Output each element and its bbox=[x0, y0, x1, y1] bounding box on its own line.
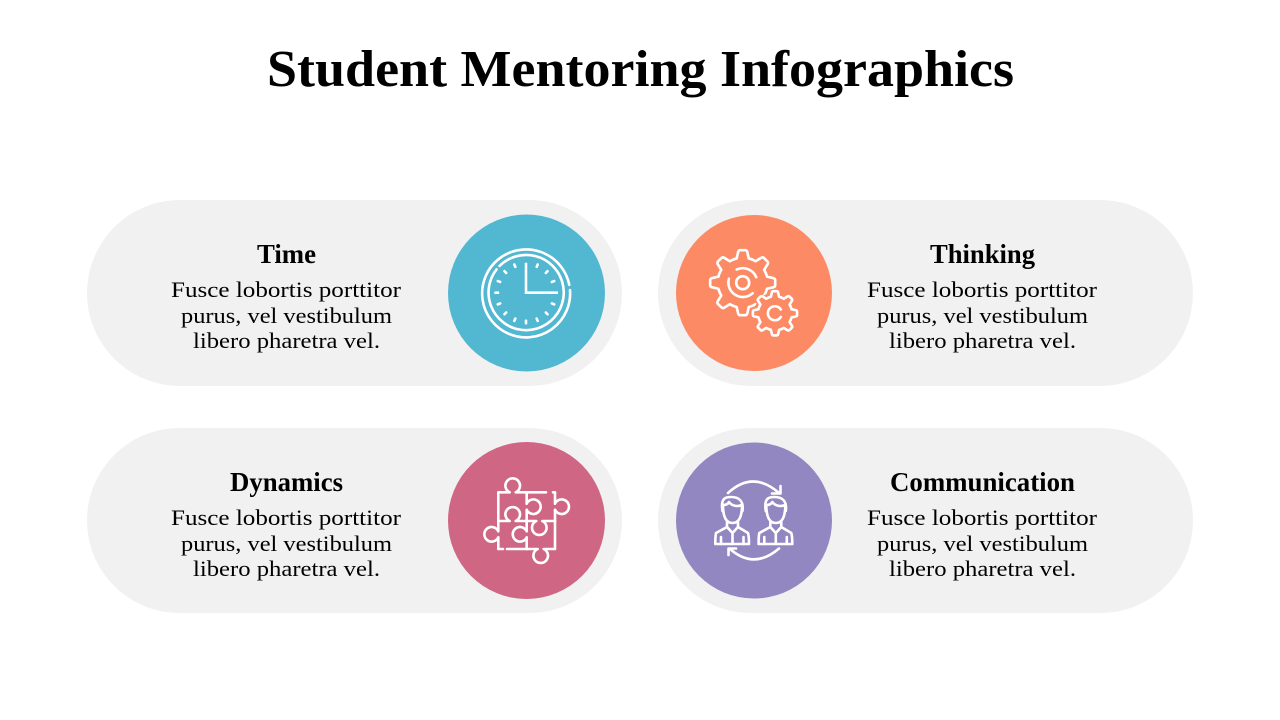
icon: clock bbox=[482, 249, 570, 337]
text block: time: purus, vel vestibulum bbox=[181, 303, 392, 328]
heading: thinking: Thinking bbox=[930, 239, 1035, 269]
panel background: thinking bbox=[658, 200, 1193, 386]
panel: time bbox=[87, 200, 622, 386]
title: Student Mentoring Infographics bbox=[267, 41, 1014, 98]
icon circle: time bbox=[448, 214, 605, 372]
icon: puzzle bbox=[484, 478, 569, 563]
text block: thinking: libero pharetra vel. bbox=[889, 328, 1076, 353]
text block: thinking: Fusce lobortis porttitor bbox=[867, 277, 1098, 302]
text block: thinking: purus, vel vestibulum bbox=[877, 303, 1088, 328]
panel: dynamics bbox=[87, 428, 622, 613]
panel background: dynamics bbox=[87, 428, 622, 613]
icon circle: communication bbox=[676, 442, 832, 598]
text block: communication: libero pharetra vel. bbox=[889, 556, 1076, 581]
text block: time: Fusce lobortis porttitor bbox=[171, 277, 402, 302]
text block: thinking bbox=[867, 277, 1098, 353]
text block: dynamics bbox=[171, 505, 402, 581]
text block: communication: Fusce lobortis porttitor bbox=[867, 505, 1098, 530]
heading: dynamics: Dynamics bbox=[230, 467, 343, 497]
text block: time bbox=[171, 277, 402, 353]
icon: two people exchanging bbox=[715, 482, 792, 559]
text block: dynamics: libero pharetra vel. bbox=[193, 556, 380, 581]
icon circle: thinking bbox=[676, 215, 832, 371]
text block: dynamics: purus, vel vestibulum bbox=[181, 531, 392, 556]
icon circle: dynamics bbox=[448, 442, 605, 599]
icon: gears bbox=[710, 250, 797, 335]
text block: communication: purus, vel vestibulum bbox=[877, 531, 1088, 556]
text block: time: libero pharetra vel. bbox=[193, 328, 380, 353]
panel background: communication bbox=[658, 428, 1193, 613]
panel: thinking bbox=[658, 200, 1193, 386]
panel: communication bbox=[658, 428, 1193, 613]
heading: time: Time bbox=[257, 239, 316, 269]
panel background: time bbox=[87, 200, 622, 386]
heading: communication: Communication bbox=[890, 467, 1075, 497]
text block: communication bbox=[867, 505, 1098, 581]
text block: dynamics: Fusce lobortis porttitor bbox=[171, 505, 402, 530]
